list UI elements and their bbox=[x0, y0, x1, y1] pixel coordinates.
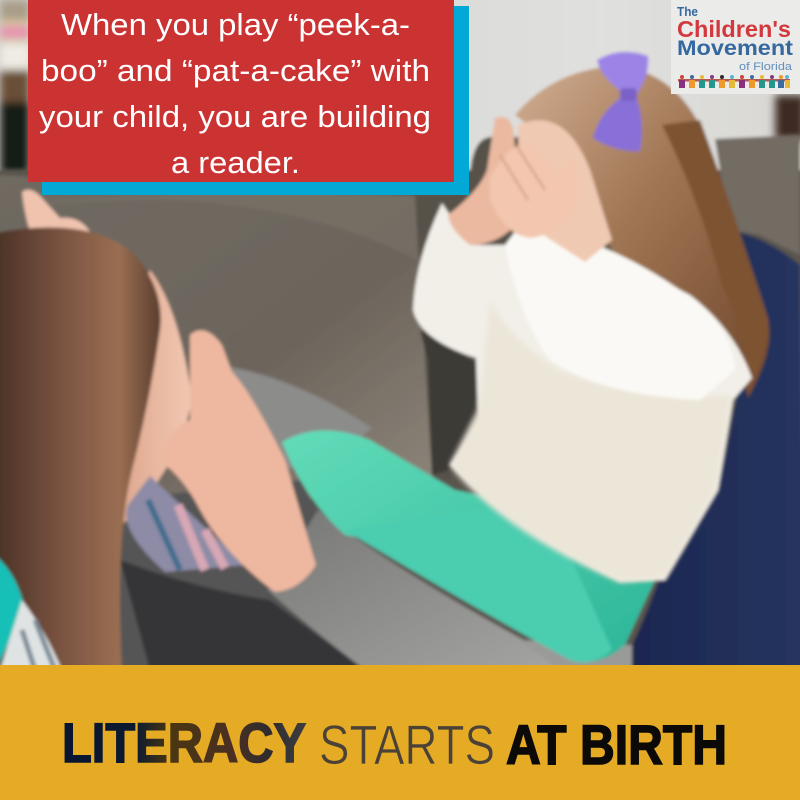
words: AT BIRTH: AT BIRTH bbox=[506, 713, 727, 776]
woman's dark sweater and gray sleeve bbox=[60, 480, 632, 670]
logo word: The: The bbox=[677, 4, 698, 19]
sofa back cushion left bbox=[0, 175, 433, 500]
banner text: Literacy Starts at Birth bbox=[62, 711, 727, 776]
woman's face and neck bbox=[100, 270, 192, 530]
sofa base fill bbox=[0, 170, 800, 670]
woman's teal top and white stripes bbox=[0, 555, 62, 670]
blurred shelf background bbox=[0, 0, 800, 174]
navy pillow bbox=[620, 232, 800, 670]
logo icon: row of paper-chain children bbox=[678, 75, 790, 88]
logo words: of Florida: of Florida bbox=[739, 61, 793, 73]
callout text bbox=[39, 7, 431, 180]
child's sweater bbox=[413, 203, 752, 582]
teal leggings bbox=[282, 430, 655, 662]
callout text: a reader. bbox=[171, 145, 300, 180]
woman's raised front hand bbox=[162, 330, 316, 592]
sofa right cushion bbox=[715, 135, 800, 255]
child's face and hands bbox=[448, 117, 612, 262]
woman's raised back hand bbox=[22, 190, 90, 232]
word: STARTS: STARTS bbox=[319, 713, 495, 776]
child's fleece vest bbox=[450, 300, 732, 582]
callout: blue shadow panel bbox=[42, 6, 469, 195]
purple hair bow bbox=[593, 52, 648, 151]
room background wall bbox=[0, 0, 800, 200]
logo word: Children's: Children's bbox=[677, 16, 791, 42]
child's hair back bbox=[515, 66, 769, 398]
logo word: Movement: Movement bbox=[677, 37, 793, 60]
sofa middle cushion bbox=[415, 137, 520, 480]
woman's gray leg on sofa bbox=[230, 367, 372, 470]
word: LITERACY: LITERACY bbox=[62, 711, 306, 774]
banner: bottom gold band bbox=[0, 665, 800, 800]
woman's hair bbox=[0, 227, 161, 670]
callout text: When you play “peek-a- bbox=[61, 7, 410, 42]
striped scarf bbox=[126, 476, 245, 572]
logo: The Children's Movement of Florida bbox=[671, 0, 800, 94]
callout: red panel with message bbox=[28, 0, 454, 182]
callout text: boo” and “pat-a-cake” with bbox=[41, 53, 430, 88]
callout text: your child, you are building bbox=[39, 99, 431, 134]
